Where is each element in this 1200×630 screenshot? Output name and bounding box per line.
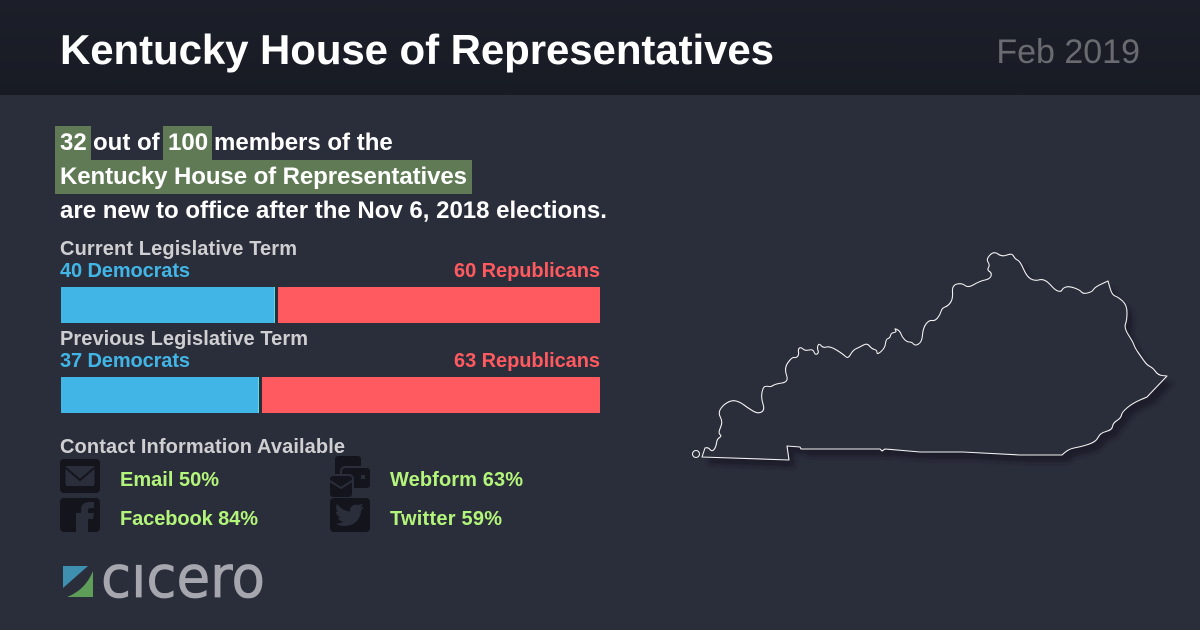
icon: twitter: [330, 498, 370, 532]
current term chart: Current Legislative Term: [60, 238, 297, 260]
summary text block: out of: [93, 129, 161, 156]
summary text block: are new to office after the Nov 6, 2018 elections.: [60, 197, 607, 224]
icon: facebook: [60, 498, 100, 532]
previous term chart: 63 Republicans: [454, 350, 600, 372]
summary text block: [55, 126, 607, 224]
title: Kentucky House of Representatives: [60, 26, 774, 73]
date: Feb 2019: [996, 33, 1140, 71]
icon: webform: [329, 456, 371, 498]
summary text block: members of the: [214, 129, 393, 156]
previous term chart: Previous Legislative Term: [60, 328, 308, 350]
contact heading: Contact Information Available: [60, 436, 345, 458]
facebook stat: Facebook 84%: [120, 508, 258, 530]
webform stat: Webform 63%: [390, 469, 523, 491]
icon: email: [60, 459, 100, 493]
current term chart: 60 Republicans: [454, 260, 600, 282]
summary text block: Kentucky House of Representatives: [60, 163, 467, 190]
twitter stat: Twitter 59%: [390, 508, 502, 530]
logo: cicero: cicero: [101, 543, 265, 611]
summary text block: 100: [168, 129, 208, 156]
current term chart: 40 Democrats: [60, 260, 190, 282]
previous term chart: 37 Democrats: [60, 350, 190, 372]
previous term chart: [60, 328, 600, 413]
email stat: Email 50%: [120, 469, 219, 491]
header band: [0, 0, 1200, 95]
map: Kentucky outline: [692, 253, 1173, 467]
logo: cicero: [63, 564, 262, 598]
summary text block: 32: [60, 129, 87, 156]
current term chart: [60, 238, 600, 323]
